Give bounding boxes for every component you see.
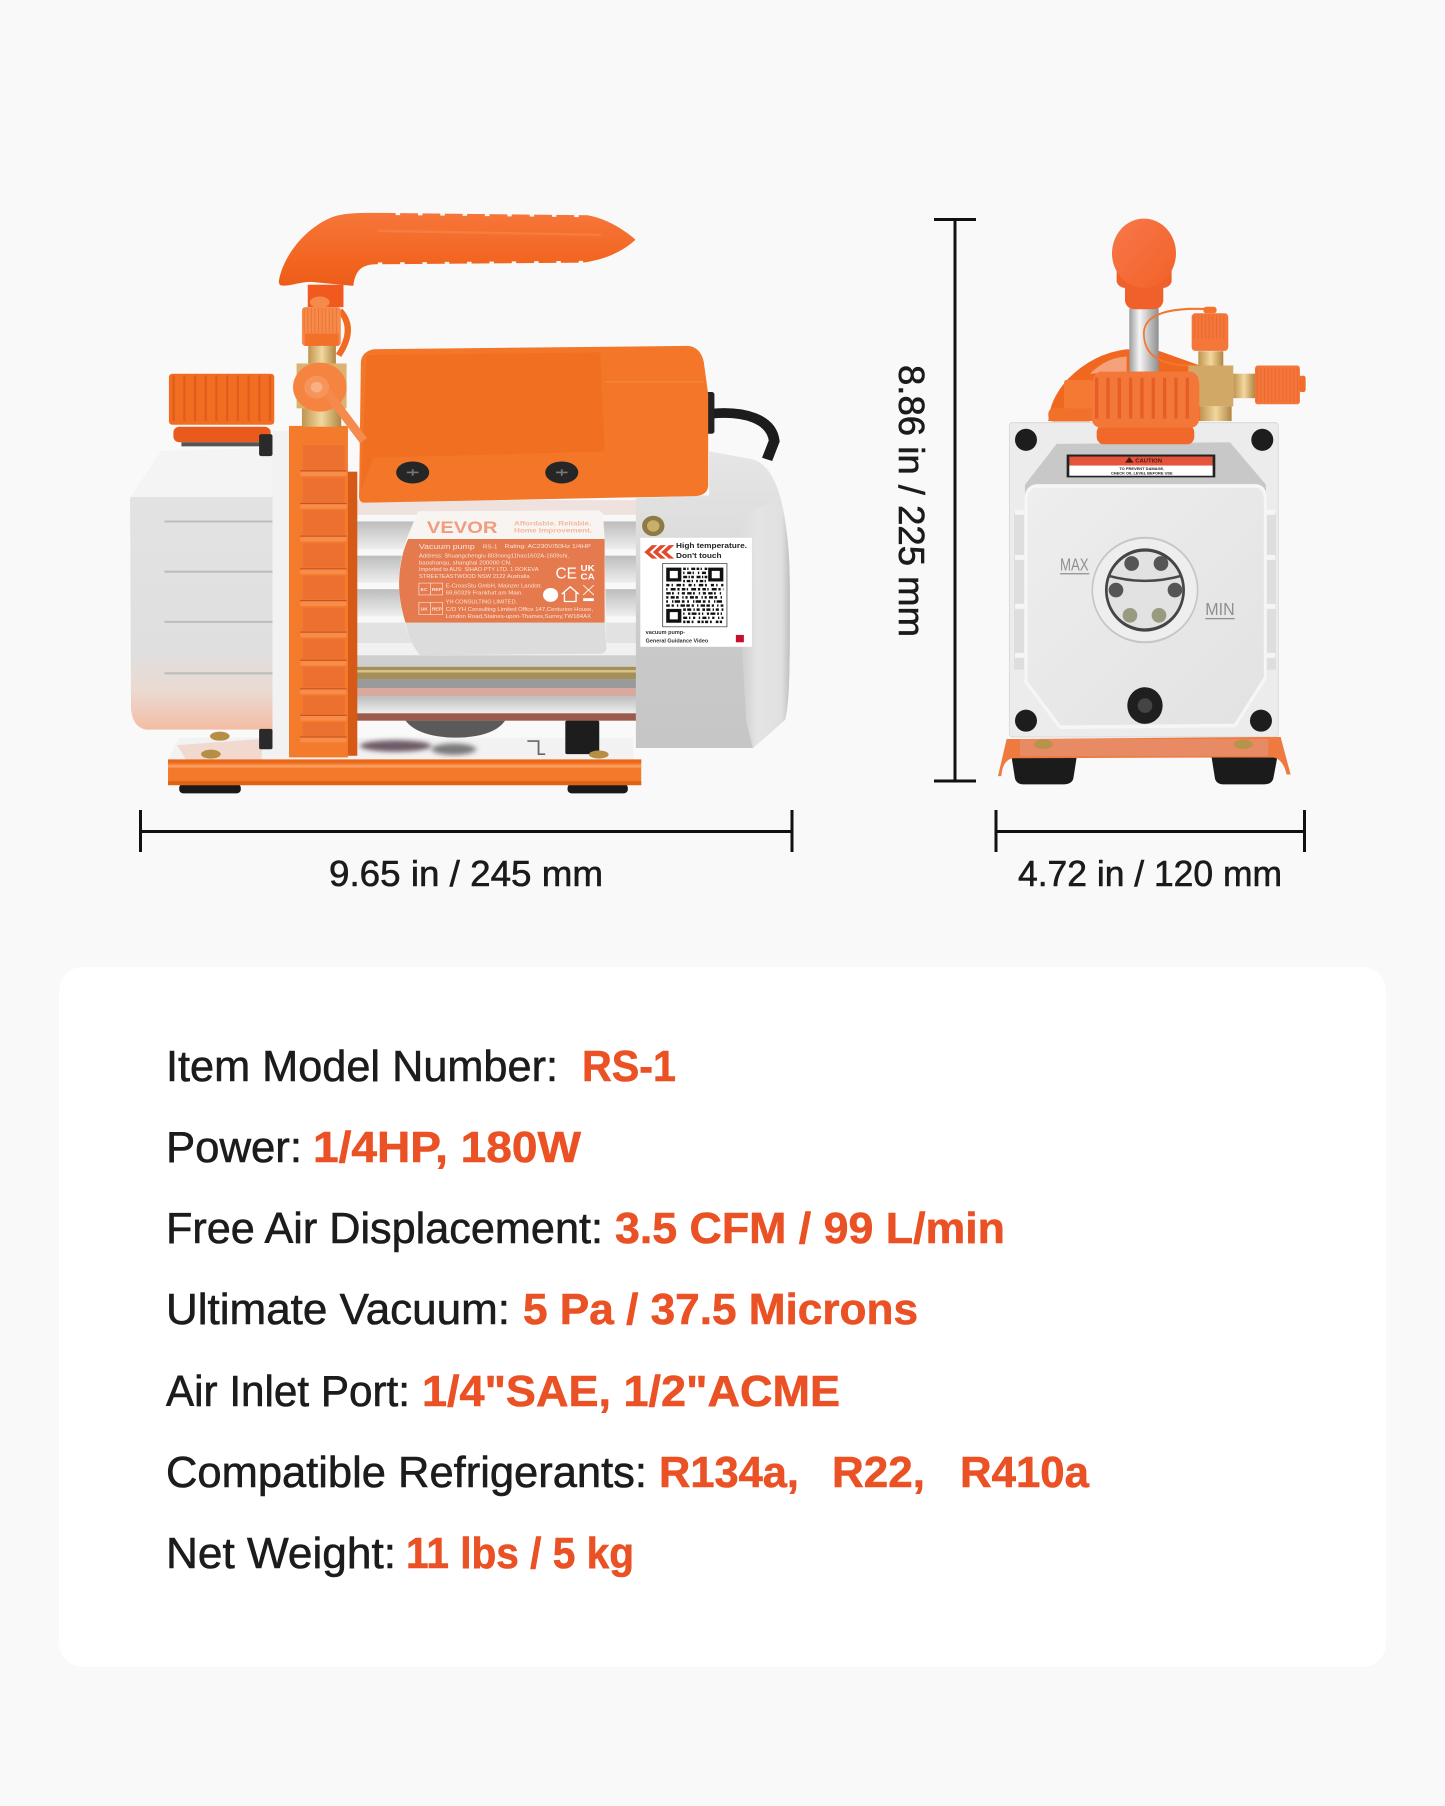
nameplate text: C/O YH Consulting Limited Office 147,Centurion House,: [446, 607, 593, 613]
nameplate text: 69,60329 Frankfurt am Main.: [446, 591, 523, 596]
EC REP and UK REP boxes: [419, 583, 443, 615]
side port cap: [1255, 366, 1306, 404]
spec: compatible refrigerants: R410a: [960, 1448, 1090, 1497]
valve stem and lever: [293, 285, 367, 443]
MAX marking: MAX: [1060, 555, 1089, 575]
nameplate text: London Road,Staines-upon-Thames,Surrey,TW184AX: [446, 614, 591, 620]
EC REP and UK REP boxes: REP: [432, 607, 442, 611]
orange handle: [279, 213, 635, 286]
label: 4.72 in / 120 mm: 4.72 in / 120 mm: [1018, 853, 1282, 894]
certification marks: CA: [581, 572, 595, 581]
spec: item model number: Item Model Number:: [166, 1042, 558, 1091]
spec: net weight: 11 lbs / 5 kg: [406, 1529, 634, 1578]
caution label: [1067, 455, 1215, 477]
sticker caption: [646, 630, 709, 645]
nameplate text: Imported to AUS: SIHAO PTY LTD. 1 ROKEVA: [419, 567, 539, 573]
motor end bell: [636, 451, 790, 748]
spec: ultimate vacuum: Ultimate Vacuum:: [166, 1285, 510, 1334]
orange base front: [998, 737, 1291, 776]
dimension: width side view: [140, 810, 792, 894]
dimension: width front view: [996, 810, 1304, 894]
rubber feet front: [1012, 757, 1277, 784]
spec: free air displacement: 3.5 CFM / 99 L/min: [615, 1204, 1005, 1253]
pump body block: [1009, 423, 1278, 737]
top port cap: [1192, 307, 1228, 351]
product photo: side view of pump: [130, 213, 790, 793]
sight glass window: [1092, 538, 1198, 642]
warning text: [676, 541, 747, 560]
spec: ultimate vacuum: 5 Pa / 37.5 Microns: [523, 1285, 918, 1334]
nameplate text: Vacuum pump: [419, 543, 475, 551]
spec: net weight: [166, 1529, 634, 1578]
caution label: CAUTION: [1135, 458, 1163, 465]
brand logo text: VEVOR: [427, 519, 497, 537]
certification marks: UK: [581, 564, 596, 573]
brass tee fitting: [1188, 351, 1255, 421]
handle rod: [1129, 308, 1159, 372]
white plate and orange ribbed column: [272, 426, 357, 757]
motor nameplate label: [399, 510, 606, 655]
brand slogan: Home Improvement.: [514, 528, 592, 534]
oil filler cap: [169, 374, 274, 456]
nameplate text: STREETEASTWOOD NSW 2122 Australia: [419, 574, 530, 580]
spec: air inlet port: 1/4"SAE, 1/2"ACME: [422, 1367, 840, 1416]
warning text: Don't touch: [676, 552, 722, 560]
certification marks: [543, 564, 596, 602]
spec: net weight: Net Weight:: [166, 1529, 396, 1578]
warning sticker with QR code: [640, 516, 752, 647]
spec: air inlet port: Air Inlet Port:: [166, 1367, 410, 1416]
caution label: CHECK OIL LEVEL BEFORE USE: [1111, 471, 1174, 476]
certification marks: CE: [556, 565, 577, 582]
brand slogan: Affordable. Reliable.: [514, 521, 591, 527]
orange motor cover with screws: [359, 346, 708, 503]
spec: air inlet port: [166, 1367, 840, 1416]
sticker caption: vacuum pump-: [646, 630, 685, 636]
label: 9.65 in / 245 mm: 9.65 in / 245 mm: [329, 853, 603, 894]
caution label: TO PREVENT DAMAGE,: [1119, 467, 1164, 471]
brand slogan: [514, 521, 592, 534]
spec: power: Power:: [166, 1123, 302, 1172]
nameplate text: Address: Shuangchenglu 803nong11hao1602A-1609shi,: [419, 554, 569, 559]
spec: ultimate vacuum: [166, 1285, 918, 1334]
spec: compatible refrigerants: Compatible Refrigerants:: [166, 1448, 647, 1497]
spec: item model number: RS-1: [582, 1042, 676, 1091]
chrome base plate: [168, 721, 633, 760]
nameplate text: Rating: AC230V/50Hz 1/4HP: [505, 544, 591, 550]
ball handle: [1112, 219, 1176, 309]
nameplate text: E-CrossStu GmbH, Mainzer Landstr.: [446, 584, 542, 589]
spec: compatible refrigerants: [166, 1448, 1090, 1497]
spec: compatible refrigerants: R22,: [832, 1448, 925, 1497]
rubber feet: [179, 784, 628, 793]
EC REP and UK REP boxes: REP: [432, 587, 442, 592]
rear orange housing: [1048, 349, 1200, 421]
orange base bar: [168, 759, 641, 785]
label: 8.86 in / 225 mm: 8.86 in / 225 mm: [891, 365, 932, 637]
motor aluminium body with fins: [348, 500, 638, 721]
nameplate text: baoshanqu, shanghai 200000 CN.: [419, 561, 512, 566]
spec: free air displacement: Free Air Displacement:: [166, 1204, 603, 1253]
left oil tank: [130, 448, 273, 730]
spec: compatible refrigerants: R134a,: [659, 1448, 799, 1497]
panel: specifications: [59, 967, 1386, 1667]
main oil filler cap: [1092, 372, 1199, 444]
MIN marking: MIN: [1205, 600, 1235, 619]
QR code: [663, 564, 727, 627]
tether strap: [1144, 309, 1210, 366]
spec: power: 1/4HP, 180W: [313, 1123, 581, 1172]
nameplate text: RS-1: [483, 545, 498, 550]
drain plug: [1127, 687, 1163, 724]
dimension: height: [891, 220, 976, 781]
EC REP and UK REP boxes: UK: [421, 607, 428, 611]
chevrons: [644, 545, 674, 559]
spec: power: [166, 1123, 581, 1172]
warning text: High temperature.: [676, 541, 747, 550]
spec: free air displacement: [166, 1204, 1005, 1253]
EC REP and UK REP boxes: EC: [421, 587, 428, 592]
sticker caption: General Guidance Video: [646, 639, 709, 645]
corner screws: [1015, 429, 1273, 732]
nameplate text: YH CONSULTING LIMITED.: [446, 600, 517, 605]
power cord: [705, 392, 774, 459]
nameplate text: [419, 543, 593, 620]
product photo: front view of pump: [998, 219, 1306, 784]
oil level plate: [1026, 486, 1265, 727]
